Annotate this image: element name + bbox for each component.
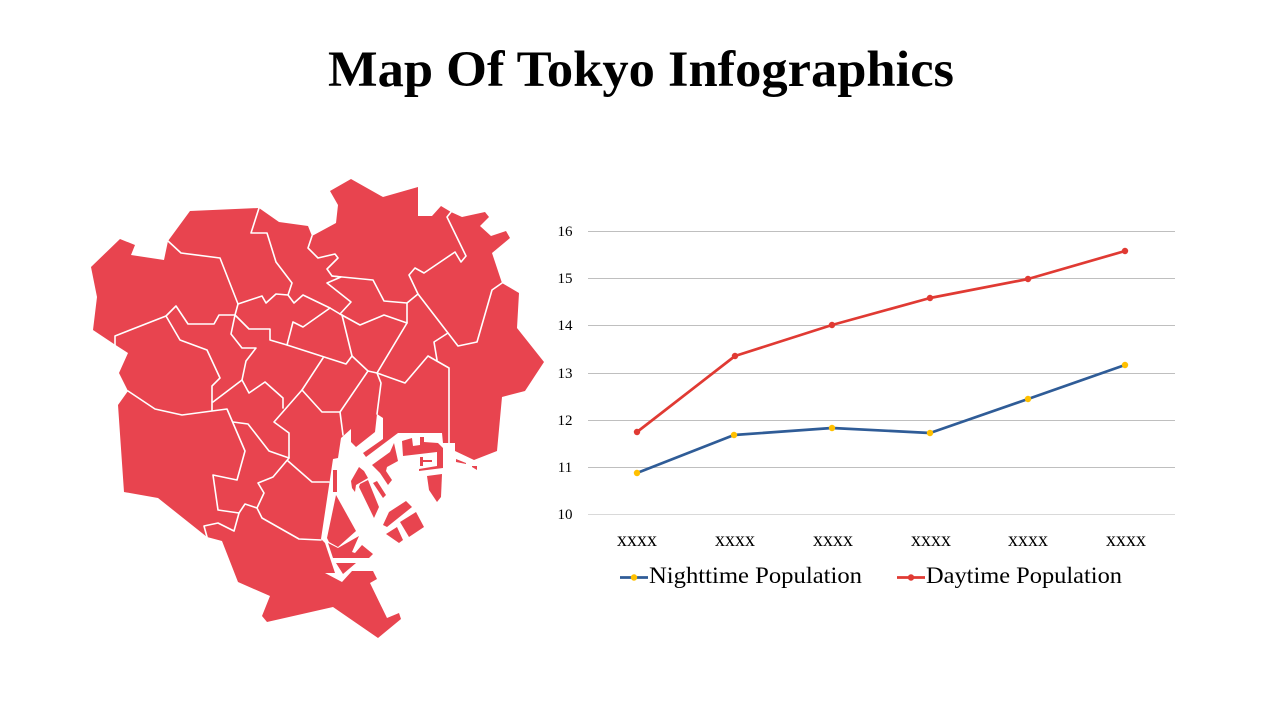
mainland silhouette — [91, 179, 544, 638]
x axis labels — [617, 527, 1146, 551]
y axis labels: 14 — [558, 318, 573, 334]
ward boundaries — [115, 208, 502, 540]
legend: Daytime Population — [926, 563, 1123, 588]
y axis labels: 10 — [558, 507, 572, 523]
y axis labels: 15 — [558, 271, 572, 287]
y axis labels: 12 — [558, 413, 572, 429]
bay islands — [327, 437, 477, 574]
series: nighttime population — [634, 362, 1128, 476]
series: daytime population — [634, 248, 1128, 435]
legend: Nighttime Population — [649, 563, 863, 588]
x axis labels: xxxx — [617, 527, 657, 551]
gridlines — [588, 232, 1175, 514]
title: Map Of Tokyo Infographics — [328, 42, 954, 98]
y axis labels — [558, 224, 573, 523]
line chart — [558, 224, 1175, 588]
x axis labels: xxxx — [715, 527, 755, 551]
map of Tokyo — [91, 179, 544, 638]
y axis labels: 13 — [558, 366, 572, 382]
x axis labels: xxxx — [813, 527, 853, 551]
x axis labels: xxxx — [1106, 527, 1146, 551]
x axis labels: xxxx — [911, 527, 951, 551]
x axis labels: xxxx — [1008, 527, 1048, 551]
y axis labels: 16 — [558, 224, 573, 240]
legend — [620, 563, 1123, 588]
y axis labels: 11 — [558, 460, 572, 476]
